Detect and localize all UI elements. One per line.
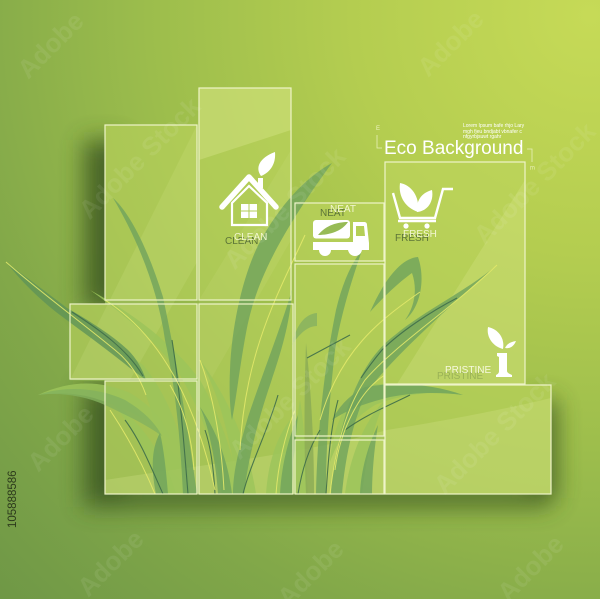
glass reflections: [70, 88, 551, 494]
watermark text: Adobe Stock: [73, 91, 206, 225]
grass blades, light green back layer: [38, 290, 463, 494]
lorem text block: Lorem Ipsum bafe rhjo Lary: [463, 123, 524, 129]
bracket letter left: E: [376, 126, 380, 132]
grass yellow veins: [6, 235, 497, 494]
watermark text: Adobe Stock: [428, 366, 561, 500]
label: pristine shadow: PRISTINE: [437, 371, 483, 382]
icon: house with leaf: [222, 152, 276, 225]
label: neat: NEAT: [330, 204, 356, 215]
graphic: shadows, glass panels and grass: [6, 87, 572, 521]
watermark text: Adobe: [21, 399, 100, 477]
label: fresh shadow: FRESH: [395, 233, 429, 244]
label: clean: CLEAN: [234, 232, 267, 243]
title: Eco Background: [384, 138, 523, 159]
grass blades, mid green: [6, 163, 497, 494]
lorem text block: nfgyrbjsuwt rgahr: [463, 134, 501, 140]
watermark text: Adobe Stock: [468, 116, 600, 250]
bracket letter right: E: [528, 166, 534, 170]
lorem text block: mgh fjeu bndjabt vbnafer c: [463, 128, 522, 134]
watermark text: Adobe Stock: [223, 331, 356, 465]
watermark text: Adobe: [411, 4, 490, 82]
panel shadows: [84, 140, 556, 507]
stock number: 105888586: [7, 470, 19, 528]
label: neat shadow: NEAT: [320, 208, 346, 219]
panel outlines: [70, 88, 551, 494]
glass panels: [70, 88, 551, 494]
watermark text: Adobe: [11, 6, 90, 84]
icon: delivery truck: [313, 220, 369, 256]
panel fills: [70, 88, 551, 494]
label: pristine: PRISTINE: [445, 365, 491, 376]
icon: info i with leaves: [488, 327, 516, 377]
label: clean shadow: CLEAN: [225, 236, 258, 247]
lorem text block: [463, 123, 524, 140]
watermark text: Adobe Stock: [218, 141, 351, 275]
grass dark veins: [72, 298, 457, 494]
label: fresh: FRESH: [403, 229, 437, 240]
icon: shopping cart with leaves: [393, 183, 453, 229]
grass: [6, 163, 497, 494]
decorative bracket marks: [377, 135, 532, 162]
